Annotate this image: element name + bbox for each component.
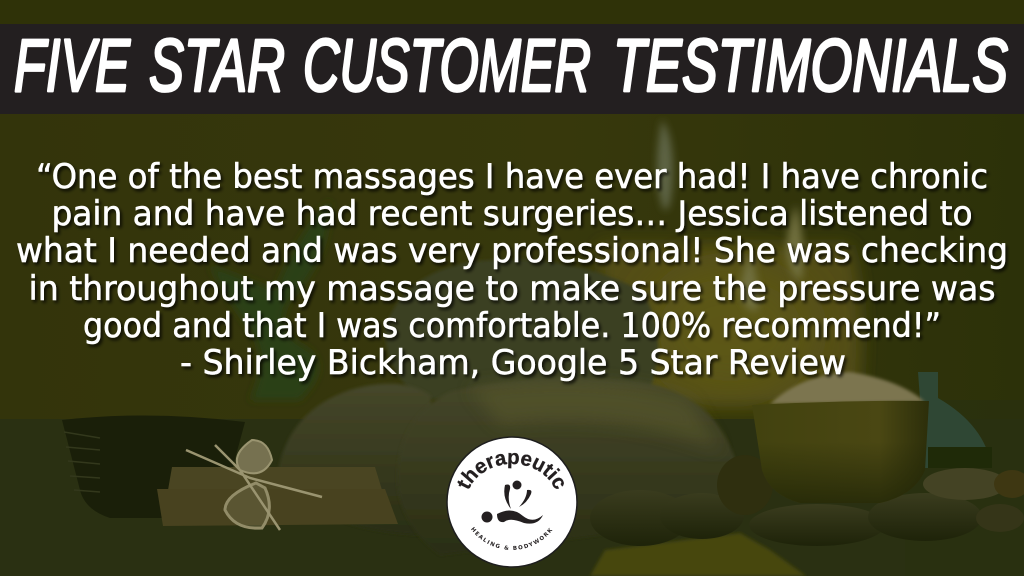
title: CUSTOMER <box>303 24 591 107</box>
dark title banner <box>0 24 1024 114</box>
testimonial quote: “One of the best massages I have ever had! I have chronic <box>36 157 988 196</box>
logo wordmark: therapeutic <box>457 452 564 489</box>
testimonial quote: in throughout my massage to make sure the pressure was <box>28 269 996 308</box>
testimonial quote: - Shirley Bickham, Google 5 Star Review <box>180 343 846 382</box>
candle glow <box>600 245 862 405</box>
testimonial quote: good and that I was comfortable. 100% recommend!” <box>83 306 941 345</box>
logo badge <box>446 436 578 568</box>
testimonial quote <box>16 157 1008 382</box>
testimonial quote: pain and have had recent surgeries… Jessica listened to <box>52 194 972 233</box>
stacked dark bowls <box>62 415 245 518</box>
testimonial quote: what I needed and was very professional! She was checking <box>16 231 1008 270</box>
candle flames <box>657 120 673 210</box>
towel rolls <box>385 259 658 400</box>
cinnamon sticks tied with twine <box>157 440 398 530</box>
dark pebbles at centre <box>590 490 690 546</box>
logo figure icon <box>482 480 543 524</box>
glass oil bottle <box>918 372 992 468</box>
lit table area <box>590 533 806 576</box>
table surface <box>0 419 1024 576</box>
bronze bowl <box>752 401 929 503</box>
bath salts <box>770 372 925 404</box>
title <box>14 24 1008 107</box>
title: FIVE <box>14 24 131 107</box>
title: STAR <box>149 24 285 107</box>
green leaves <box>210 200 330 400</box>
logo tagline: HEALING & BODYWORK <box>471 526 552 550</box>
